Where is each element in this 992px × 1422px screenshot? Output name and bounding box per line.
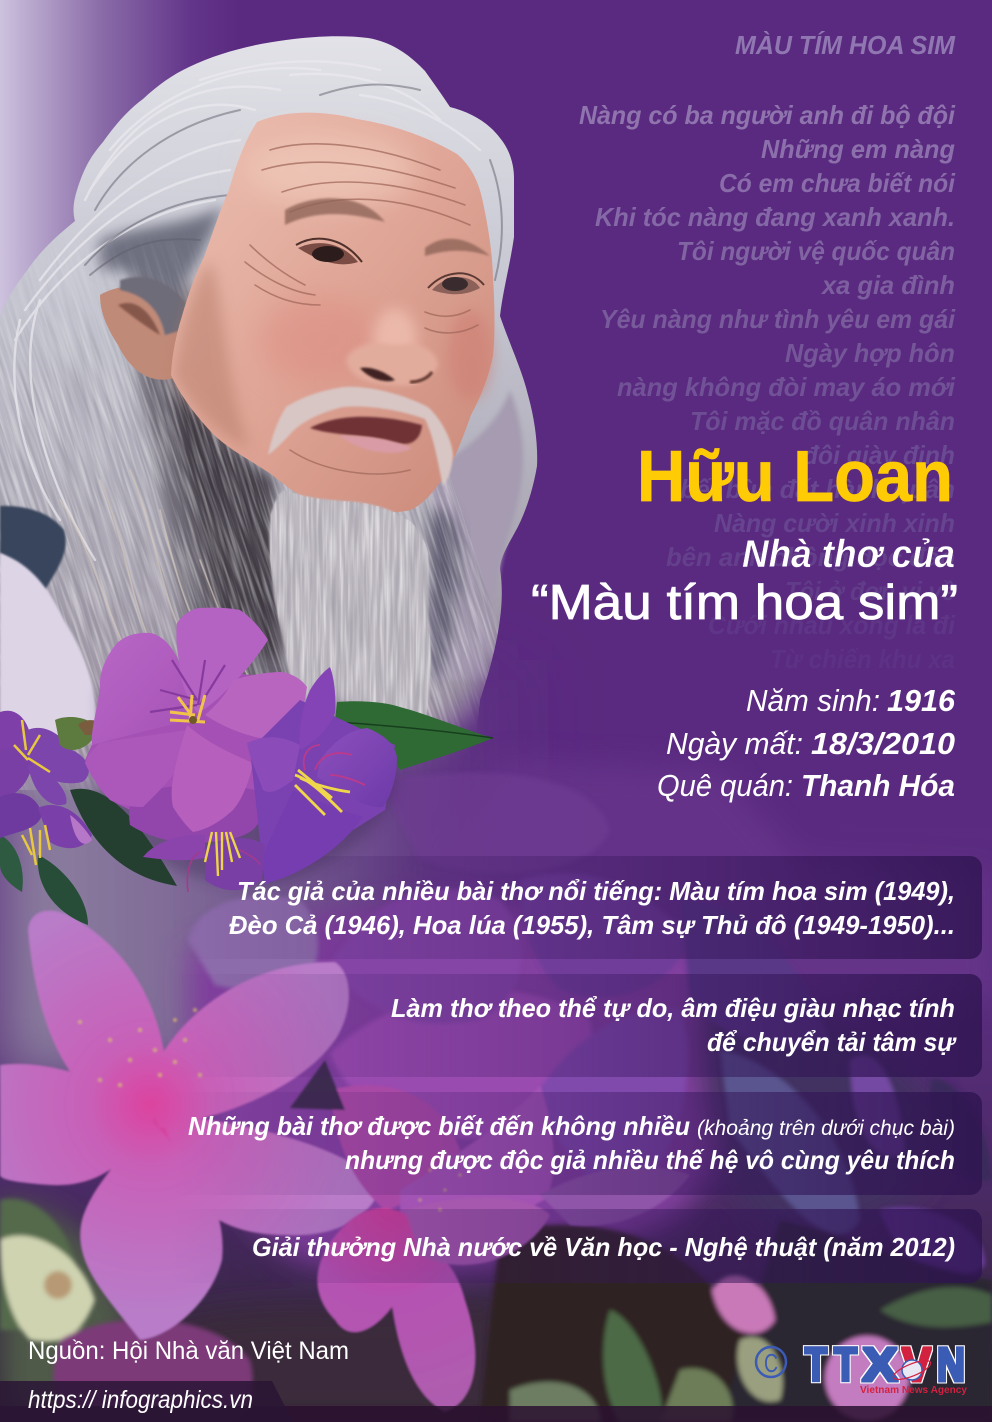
leaf: bottom left [38, 855, 88, 925]
flower: base colour wash [0, 905, 950, 1422]
poem text: Màu tím hoa sim: Từ chiến khu xa [770, 644, 955, 674]
hair silhouette [0, 36, 537, 800]
icon: globe [891, 1357, 933, 1383]
footer band [0, 1381, 992, 1422]
subtitle: Nhà thơ của: Nhà thơ của [742, 533, 955, 576]
logo letters: X [862, 1339, 898, 1392]
flower: violet right [247, 667, 397, 885]
small flower lower left [0, 793, 92, 865]
hair texture [0, 256, 499, 788]
biography facts: Ngày mất: [666, 726, 803, 761]
dark hair shadow behind ear [127, 272, 290, 676]
poem text: Màu tím hoa sim: Ngày hợp hôn [785, 338, 955, 368]
text block: award: Giải thưởng Nhà nước về Văn học - Nghệ thuật (năm 2012) [252, 1232, 955, 1262]
eyebrows [285, 198, 385, 225]
leaf: long green right [333, 701, 493, 770]
panel: poetic style [170, 974, 982, 1077]
hair strands [14, 61, 480, 560]
poem text: Màu tím hoa sim: xa gia đình [820, 270, 955, 300]
nose [346, 343, 438, 386]
logo: TTXVN: Vietnam News Agency [860, 1384, 967, 1396]
panel: readership [170, 1092, 982, 1195]
poem text: Màu tím hoa sim [579, 30, 956, 674]
subtitle: Màu tím hoa sim: “Màu tím hoa sim” [531, 576, 958, 630]
text block: style [391, 993, 957, 1057]
poem text: Màu tím hoa sim: Cưới nhau xong là đi [708, 610, 956, 640]
text block: readership: (khoảng trên dưới chục bài) [697, 1117, 955, 1140]
poem text: Màu tím hoa sim: Tôi mặc đồ quân nhân [690, 406, 955, 436]
panel: poems works [170, 856, 982, 959]
poem text: Màu tím hoa sim: bết bùn đất hành quân [680, 474, 955, 504]
poem text: Màu tím hoa sim: Những em nàng [761, 134, 955, 164]
background flower photo [0, 773, 992, 1422]
text block: readership [188, 1111, 955, 1175]
title: Hữu Loan: Hữu Loan [637, 437, 953, 517]
icon: copyright: C [764, 1348, 778, 1378]
poem text: Màu tím hoa sim: Tôi người vệ quốc quân [677, 236, 955, 266]
biography facts: Quê quán: [657, 768, 793, 803]
flower: large pink blossom left [0, 911, 382, 1340]
biography facts: 18/3/2010 [811, 726, 955, 761]
portrait of Hữu Loan [0, 36, 538, 794]
flower: dark lower area and leaves [0, 1199, 992, 1422]
text block: readership: nhưng được độc giả nhiều thế hệ vô cùng yêu thích [345, 1145, 955, 1175]
moustache [268, 387, 453, 486]
flower: upper middle blurred blossoms [188, 773, 992, 1278]
logo letters [805, 1339, 965, 1392]
poem text: Màu tím hoa sim: Nàng có ba người anh đi bộ đội [579, 100, 956, 130]
poem text: Màu tím hoa sim: Có em chưa biết nói [719, 168, 956, 198]
clothing [0, 506, 66, 590]
text block: readership: Những bài thơ được biết đến không nhiều [188, 1111, 690, 1141]
icon: copyright [756, 1347, 786, 1378]
panel: award [170, 1209, 982, 1283]
leaf: dark lower left [70, 789, 177, 886]
eyes [296, 239, 484, 294]
source: Nguồn: Hội Nhà văn Việt Nam [28, 1337, 349, 1365]
biography facts: Năm sinh: [746, 683, 880, 718]
biography facts: Thanh Hóa [801, 768, 955, 803]
beard [268, 490, 432, 717]
flower: main pink [85, 608, 307, 843]
face [171, 113, 494, 513]
text block: famous poems: Đèo Cả (1946), Hoa lúa (1955), Tâm sự Thủ đô (1949-1950)... [229, 910, 955, 940]
poem text: Màu tím hoa sim: nàng không đòi may áo mới [617, 372, 956, 402]
poem text: Màu tím hoa sim: MÀU TÍM HOA SIM [735, 30, 956, 60]
flower: lower violet [143, 832, 265, 892]
poem text: Màu tím hoa sim: Tôi ở đơn vị về [785, 576, 955, 606]
flower bouquet [0, 608, 493, 925]
leaf: far left [0, 835, 23, 892]
logo letters: T [805, 1339, 827, 1392]
website: https:// infographics.vn [28, 1386, 253, 1414]
logo letters: N [937, 1339, 965, 1392]
text block: famous poems [229, 876, 955, 940]
buds [55, 717, 100, 750]
mouth [310, 417, 422, 453]
poem text: Màu tím hoa sim: bên anh chồng độc đáo [666, 542, 955, 572]
logo: TTXVN [756, 1339, 967, 1396]
logo letters: T [834, 1339, 857, 1392]
face shading [172, 135, 492, 450]
flower: pink blossom centre [290, 1060, 690, 1412]
biography facts: 1916 [887, 683, 956, 718]
ear [100, 287, 180, 380]
bouquet shadow [100, 690, 395, 885]
poem text: Màu tím hoa sim: Nàng cười xinh xinh [714, 508, 955, 538]
forehead wrinkles [245, 144, 478, 474]
text block: style: Làm thơ theo thể tự do, âm điệu giàu nhạc tính [391, 993, 955, 1023]
poem text: Màu tím hoa sim: đôi giày đinh [803, 440, 955, 470]
poem text: Màu tím hoa sim: Yêu nàng như tình yêu em gái [600, 304, 956, 334]
text block: style: để chuyển tải tâm sự [707, 1027, 957, 1057]
biography facts [657, 683, 956, 803]
small flower upper left [0, 711, 89, 805]
text block: famous poems: Tác giả của nhiều bài thơ nổi tiếng: Màu tím hoa sim (1949), [237, 876, 955, 906]
logo letters: V [902, 1339, 931, 1392]
poem text: Màu tím hoa sim: Khi tóc nàng đang xanh xanh. [595, 202, 955, 232]
